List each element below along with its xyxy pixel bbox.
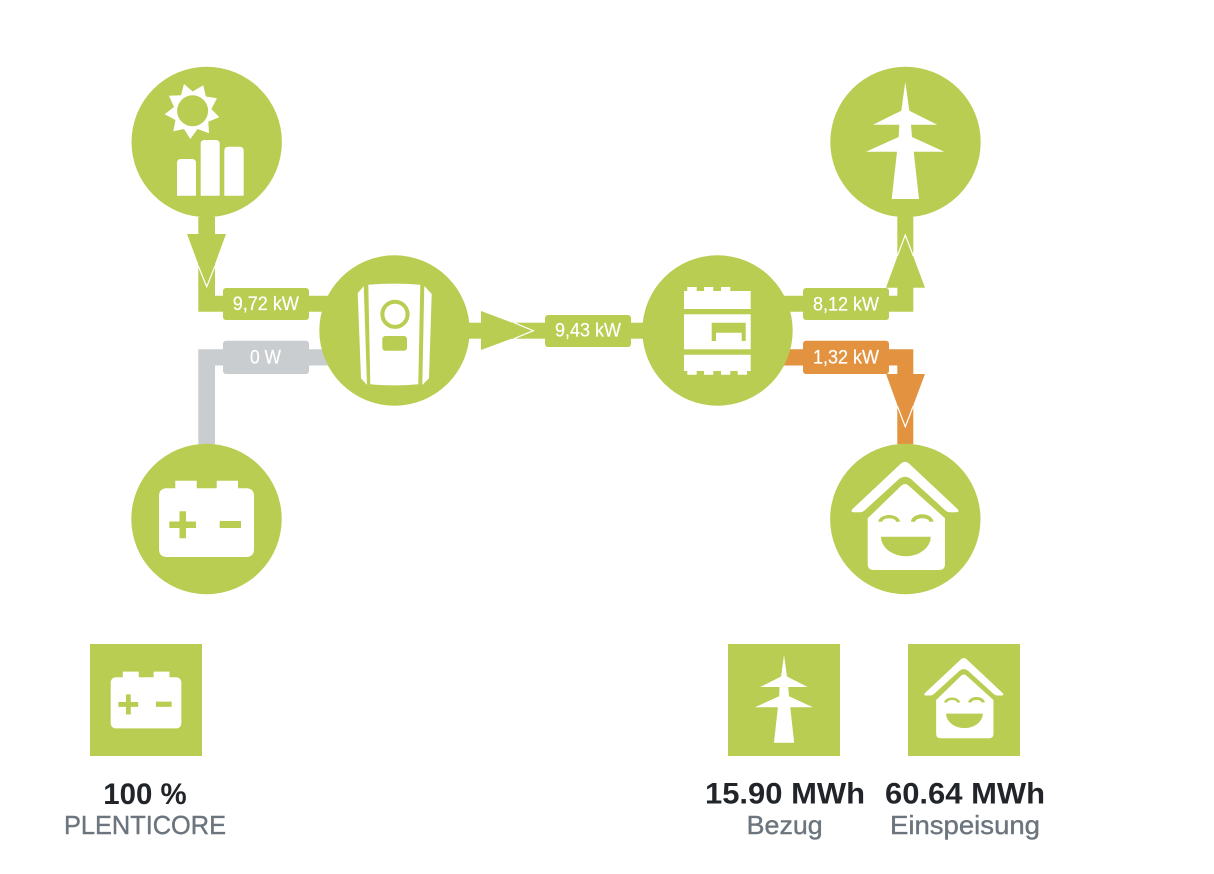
node: inverter [319,255,470,406]
flow line: solar to inverter [187,217,330,312]
stat: battery charge [64,644,226,840]
node: home [830,444,980,594]
flow line: battery to inverter [198,349,330,444]
value: 100 %: 100 % [103,778,187,811]
icon: inverter housing [358,284,432,385]
label: grid feed-in [803,288,889,320]
node: battery [131,444,282,594]
caption: PLENTICORE: PLENTICORE [64,810,226,840]
icon: sun [165,84,219,139]
label: solar power [223,288,309,320]
label: inverter output [545,315,631,347]
caption: Einspeisung: Einspeisung [890,810,1040,840]
icon: small house [924,658,1003,738]
icon: battery [159,481,254,557]
label: home consumption [803,341,889,374]
label: battery power [223,341,309,374]
label: grid feed-in: 8,12 kW [813,294,879,315]
label: battery power: 0 W [250,347,281,368]
node: solar panels and sun [132,67,282,217]
flow line: inverter to meter [465,311,645,350]
label: home consumption: 1,32 kW [813,347,879,368]
icon: meter [684,287,751,375]
flow line: meter to home [780,349,925,444]
value: 60.64 MWh: 60.64 MWh [885,778,1045,810]
label: inverter output: 9,43 kW [555,321,621,342]
icon: smiling house [852,462,958,570]
stat: grid export [885,644,1045,840]
icon: pylon [866,82,944,199]
icon: small battery [111,672,181,728]
icon: solar bars [177,140,244,196]
node: power grid [830,67,981,217]
stat: grid import [705,644,865,840]
caption: Bezug: Bezug [747,810,823,840]
node: energy meter [642,255,793,406]
flow line: meter to grid [780,217,925,312]
label: solar power: 9,72 kW [233,294,299,315]
value: 15.90 MWh: 15.90 MWh [705,778,865,810]
icon: small pylon [755,655,813,743]
